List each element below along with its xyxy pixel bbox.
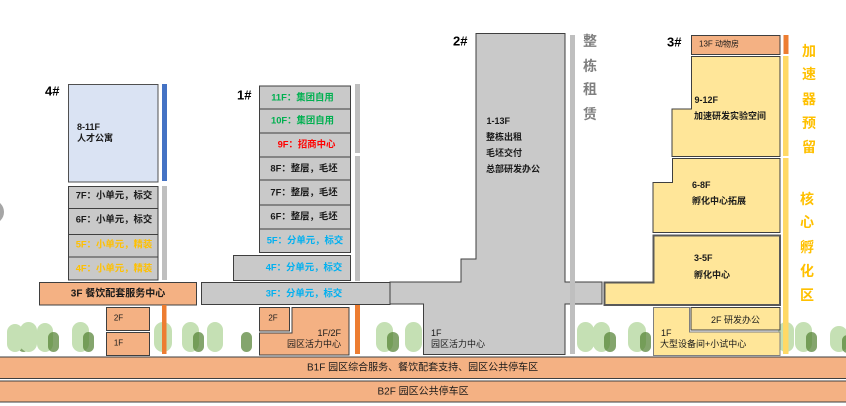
13F bbox=[692, 36, 780, 54]
orange side bar bbox=[355, 305, 360, 354]
7F: 7F：小单元，标交 bbox=[76, 190, 152, 200]
vertical label: whole building lease: 栋 bbox=[583, 58, 597, 74]
6F bbox=[260, 205, 350, 229]
building 2# bbox=[390, 33, 602, 354]
1F/2F activity center: 1F/2F bbox=[317, 328, 341, 338]
1F equipment and pilot center: 大型设备间+小试中心 bbox=[660, 338, 746, 349]
tower description: 整栋出租 bbox=[486, 131, 522, 142]
building 1# bbox=[234, 84, 360, 355]
11F: 11F：集团自用 bbox=[271, 92, 334, 102]
10F: 10F：集团自用 bbox=[271, 114, 334, 126]
6-8F incubation expansion: 6-8F bbox=[692, 180, 711, 190]
vertical label: accelerator reserve: 器 bbox=[802, 91, 816, 107]
6F bbox=[68, 208, 158, 234]
2F bbox=[106, 308, 150, 330]
label 2#: 2# bbox=[453, 34, 468, 48]
9F: 9F：招商中心 bbox=[278, 138, 336, 150]
3F floor of building 1#: 3F：分单元，标交 bbox=[266, 288, 342, 298]
4F bbox=[68, 257, 158, 280]
1F bbox=[106, 332, 150, 356]
vertical label: accelerator reserve: 加 bbox=[802, 43, 816, 59]
label 3#: 3# bbox=[667, 34, 682, 50]
3F floor of building 1# bbox=[202, 282, 390, 304]
2F bbox=[260, 308, 290, 331]
tower description: 毛坯交付 bbox=[486, 147, 522, 158]
8-11F talent apartments: 人才公寓 bbox=[77, 132, 113, 143]
10F bbox=[260, 109, 350, 133]
7F: 7F：整层，毛坯 bbox=[270, 186, 338, 198]
vertical label: whole building lease bbox=[583, 33, 597, 122]
9F bbox=[260, 133, 350, 157]
grey side bar upper bbox=[355, 84, 360, 153]
blue side bar bbox=[162, 84, 167, 181]
3-5F incubation center: 孵化中心 bbox=[694, 269, 730, 280]
1F activity center: 1F bbox=[431, 328, 442, 338]
tower description bbox=[486, 116, 540, 174]
13F: 13F 动物房 bbox=[699, 38, 739, 48]
6F: 6F：小单元，标交 bbox=[76, 214, 152, 224]
8F bbox=[260, 157, 350, 180]
1F activity center bbox=[431, 328, 485, 349]
9-12F accelerator lab: 加速研发实验空间 bbox=[694, 110, 766, 121]
4F bbox=[234, 256, 350, 280]
2F R&D office bbox=[691, 308, 780, 330]
2F R&D office: 2F 研发办公 bbox=[711, 314, 760, 325]
vertical label: core incubation zone: 化 bbox=[800, 263, 814, 279]
4F: 4F：分单元，标交 bbox=[266, 262, 342, 272]
vertical label: core incubation zone bbox=[800, 191, 814, 303]
orange side bar bbox=[162, 305, 166, 354]
vertical label: accelerator reserve: 预 bbox=[802, 115, 816, 131]
grey side bar bbox=[162, 186, 167, 280]
1F/2F activity center bbox=[260, 308, 349, 355]
building 4# bbox=[40, 84, 196, 356]
vertical label: core incubation zone: 区 bbox=[800, 287, 814, 303]
8F: 8F：整层，毛坯 bbox=[270, 162, 338, 174]
vertical label: whole building lease: 整 bbox=[583, 33, 597, 49]
8-11F talent apartments bbox=[68, 84, 158, 182]
label 1#: 1# bbox=[237, 88, 252, 102]
decorative grey circle at left edge bbox=[0, 200, 4, 224]
2F: 2F bbox=[114, 314, 123, 322]
grey side bar lower bbox=[355, 156, 360, 281]
5F: 5F：小单元，精装 bbox=[76, 238, 153, 250]
vertical label: whole building lease: 租 bbox=[583, 81, 597, 97]
7F bbox=[260, 180, 350, 205]
vertical label: core incubation zone: 孵 bbox=[800, 239, 814, 255]
tower body bbox=[390, 34, 602, 354]
9-12F accelerator lab: 9-12F bbox=[694, 95, 719, 105]
tower description: 总部研发办公 bbox=[486, 163, 540, 174]
B1F band: B1F 园区综合服务、餐饮配套支持、园区公共停车区 bbox=[307, 360, 538, 374]
vertical label: core incubation zone: 核 bbox=[800, 191, 814, 207]
4F: 4F：小单元，精装 bbox=[76, 262, 153, 274]
1F equipment and pilot center bbox=[654, 308, 780, 356]
vertical label: accelerator reserve: 速 bbox=[802, 66, 816, 82]
vertical label: accelerator reserve bbox=[802, 43, 816, 155]
6-8F incubation expansion: 孵化中心拓展 bbox=[692, 195, 746, 206]
3F catering service center: 3F 餐饮配套服务中心 bbox=[71, 286, 165, 300]
11F bbox=[260, 86, 350, 109]
3F catering service center bbox=[40, 282, 196, 305]
6-8F incubation expansion bbox=[653, 158, 780, 232]
vertical label: accelerator reserve: 留 bbox=[802, 139, 816, 155]
B2F band bbox=[0, 381, 846, 402]
1F: 1F bbox=[114, 338, 123, 348]
1F equipment and pilot center: 1F bbox=[661, 328, 672, 338]
vertical label: core incubation zone: 心 bbox=[800, 214, 814, 230]
7F bbox=[68, 186, 158, 208]
5F bbox=[68, 234, 158, 257]
vertical label: whole building lease: 赁 bbox=[583, 106, 597, 122]
B2F band: B2F 园区公共停车区 bbox=[378, 384, 469, 398]
tower description: 1-13F bbox=[486, 116, 511, 126]
5F bbox=[260, 229, 350, 252]
3-5F incubation center: 3-5F bbox=[694, 253, 713, 263]
6F: 6F：整层，毛坯 bbox=[270, 210, 338, 222]
yellow side bar lower bbox=[783, 158, 788, 354]
8-11F talent apartments: 8-11F bbox=[77, 122, 101, 132]
label 4#: 4# bbox=[45, 84, 60, 98]
1F/2F activity center: 园区活力中心 bbox=[287, 338, 341, 349]
9-12F accelerator lab bbox=[672, 56, 780, 156]
yellow side bar upper bbox=[783, 56, 788, 156]
2F: 2F bbox=[268, 314, 278, 322]
orange side bar bbox=[784, 35, 788, 54]
3-5F incubation center bbox=[604, 236, 780, 305]
5F: 5F：分单元，标交 bbox=[267, 234, 343, 246]
B1F band bbox=[0, 357, 846, 378]
grey side bar bbox=[570, 35, 575, 354]
1F activity center: 园区活力中心 bbox=[431, 338, 485, 349]
trees row bbox=[7, 322, 846, 353]
building 3# bbox=[604, 34, 816, 356]
